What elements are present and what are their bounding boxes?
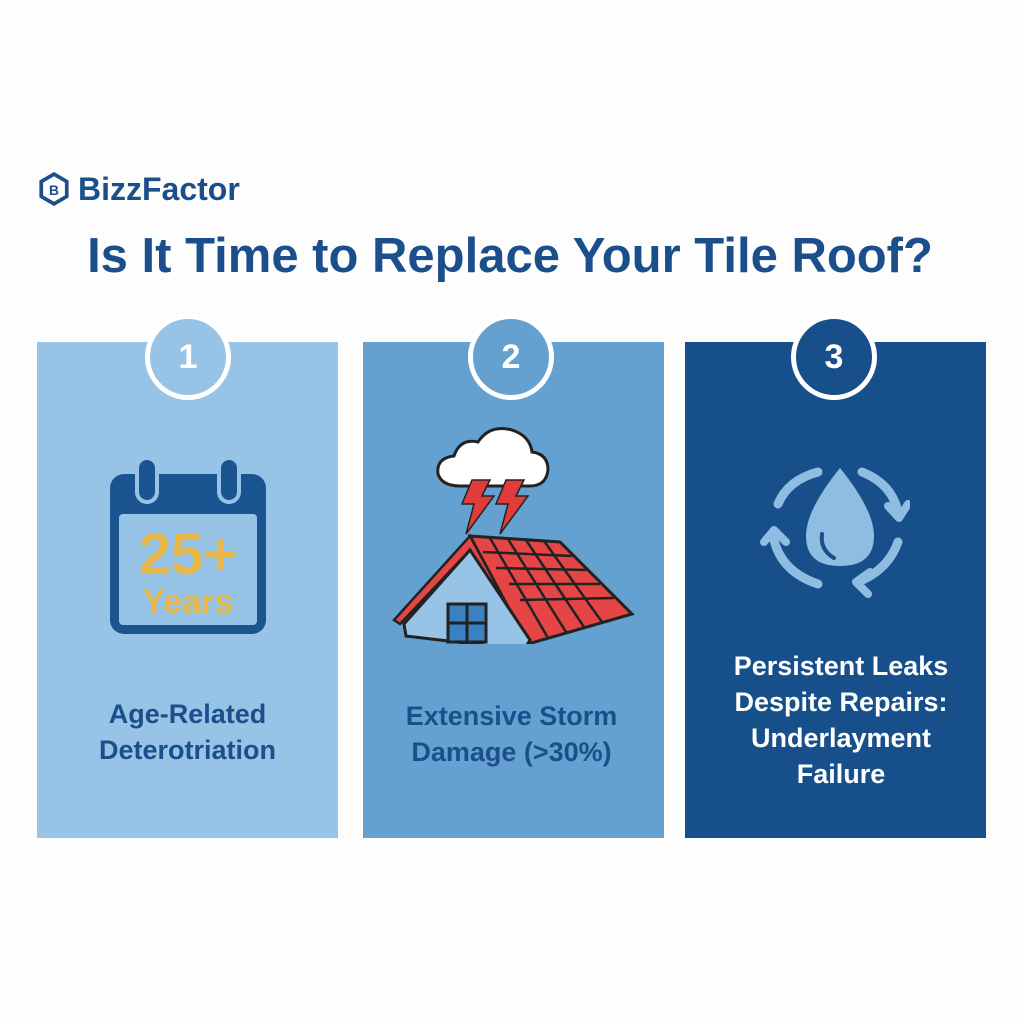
label: Deterotriation: [99, 735, 276, 765]
label: Damage (>30%): [411, 737, 612, 767]
logo: B: [49, 182, 59, 198]
label: Age-Related: [109, 699, 266, 729]
number 3: 3: [825, 338, 843, 376]
panel: storm: [363, 342, 664, 838]
label: Persistent Leaks: [734, 651, 948, 681]
label: Despite Repairs:: [734, 687, 948, 717]
icon: calendar: [110, 460, 266, 634]
icon: calendar: Years: [143, 583, 233, 621]
label: Extensive Storm: [406, 701, 617, 731]
title: Is It Time to Replace Your Tile Roof?: [87, 229, 933, 283]
icon: storm roof: [392, 427, 635, 644]
label: [99, 699, 276, 765]
number 3: [791, 314, 877, 400]
icon: water drop cycle: [760, 468, 910, 598]
number 2: 2: [502, 338, 520, 376]
panel: leaks: [685, 342, 986, 838]
logo: BizzFactor: [78, 171, 240, 207]
panel: age: [37, 342, 338, 838]
icon: calendar: 25+: [139, 522, 237, 587]
label: [734, 651, 948, 789]
number 1: 1: [179, 338, 197, 376]
number 1: [145, 314, 231, 400]
label: Failure: [797, 759, 885, 789]
label: [406, 701, 617, 767]
number 2: [468, 314, 554, 400]
label: Underlayment: [751, 723, 931, 753]
